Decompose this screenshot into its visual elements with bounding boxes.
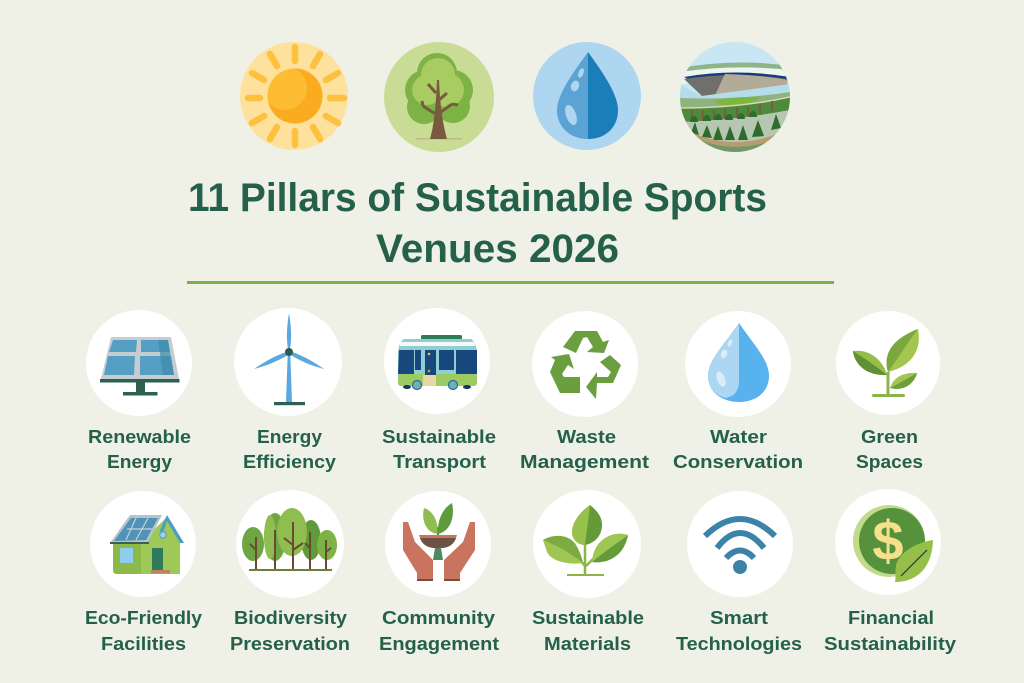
pillar: Renewable Energy	[86, 310, 192, 472]
icon: dollar coin with leaf	[853, 505, 933, 582]
icon: bus	[398, 335, 477, 390]
pillar: Waste Management	[520, 311, 649, 472]
pillar: Financial Sustainability	[824, 489, 957, 654]
icon: trees	[242, 508, 337, 571]
title: 11 Pillars of Sustainable Sports	[188, 176, 767, 220]
pillar: Sustainable Transport: Transport	[393, 451, 486, 472]
pillar: Community Engagement: Engagement	[379, 633, 499, 654]
pillar: Eco-Friendly Facilities: Facilities	[101, 633, 186, 654]
pillar: Smart Technologies	[676, 491, 802, 654]
pillar: Sustainable Materials: Materials	[544, 633, 631, 654]
pillar: Sustainable Materials	[532, 490, 644, 654]
icon: tree	[384, 42, 494, 152]
pillar: Community Engagement	[379, 491, 499, 654]
pillar: Biodiversity Preservation: Preservation	[230, 633, 350, 654]
pillar: Green Spaces	[836, 311, 940, 472]
pillar: Water Conservation	[673, 311, 803, 472]
title	[188, 176, 767, 271]
icon: sprout	[853, 329, 919, 397]
icon: wifi	[705, 519, 775, 574]
pillar: Water Conservation: Conservation	[673, 451, 803, 472]
icon: recycle	[550, 331, 621, 399]
pillar: Community Engagement: Community	[382, 607, 496, 628]
pillar: Waste Management: Management	[520, 451, 649, 472]
pillar: Biodiversity Preservation	[230, 490, 350, 654]
pillar: Smart Technologies: Technologies	[676, 633, 802, 654]
icon: wind turbine	[254, 313, 324, 405]
pillar: Green Spaces: Green	[861, 426, 918, 447]
icon: sun	[240, 42, 348, 150]
icon: eco house	[110, 515, 184, 574]
icon: water drop	[533, 42, 641, 150]
icon: water drop	[708, 323, 769, 402]
pillar: Sustainable Transport	[382, 308, 496, 472]
pillar: Renewable Energy: Renewable	[88, 426, 191, 447]
pillar: Eco-Friendly Facilities	[85, 491, 203, 654]
pillar: Water Conservation: Water	[710, 426, 767, 447]
pillar: Sustainable Transport: Sustainable	[382, 426, 496, 447]
pillar: Energy Efficiency	[234, 308, 342, 472]
icon: hands with plant	[403, 503, 475, 581]
pillar: Green Spaces: Spaces	[856, 451, 923, 472]
pillar: Financial Sustainability: Financial	[848, 607, 934, 628]
title: Venues 2026	[376, 227, 619, 271]
pillar: Energy Efficiency: Efficiency	[243, 451, 337, 472]
icon: three-leaf plant	[543, 505, 628, 576]
pillar: Smart Technologies: Smart	[710, 607, 768, 628]
pillar: Waste Management: Waste	[557, 426, 616, 447]
pillar: Sustainable Materials: Sustainable	[532, 607, 644, 628]
pillar: Biodiversity Preservation: Biodiversity	[234, 607, 348, 628]
header icon row	[240, 42, 790, 152]
icon: dollar coin with leaf: $	[872, 509, 904, 572]
pillar: Energy Efficiency: Energy	[257, 426, 323, 447]
pillar: Renewable Energy: Energy	[107, 451, 173, 472]
icon: solar panel	[100, 337, 180, 396]
pillar: Financial Sustainability: Sustainability	[824, 633, 957, 654]
icon: stadium	[680, 42, 790, 152]
pillar: Eco-Friendly Facilities: Eco-Friendly	[85, 607, 203, 628]
